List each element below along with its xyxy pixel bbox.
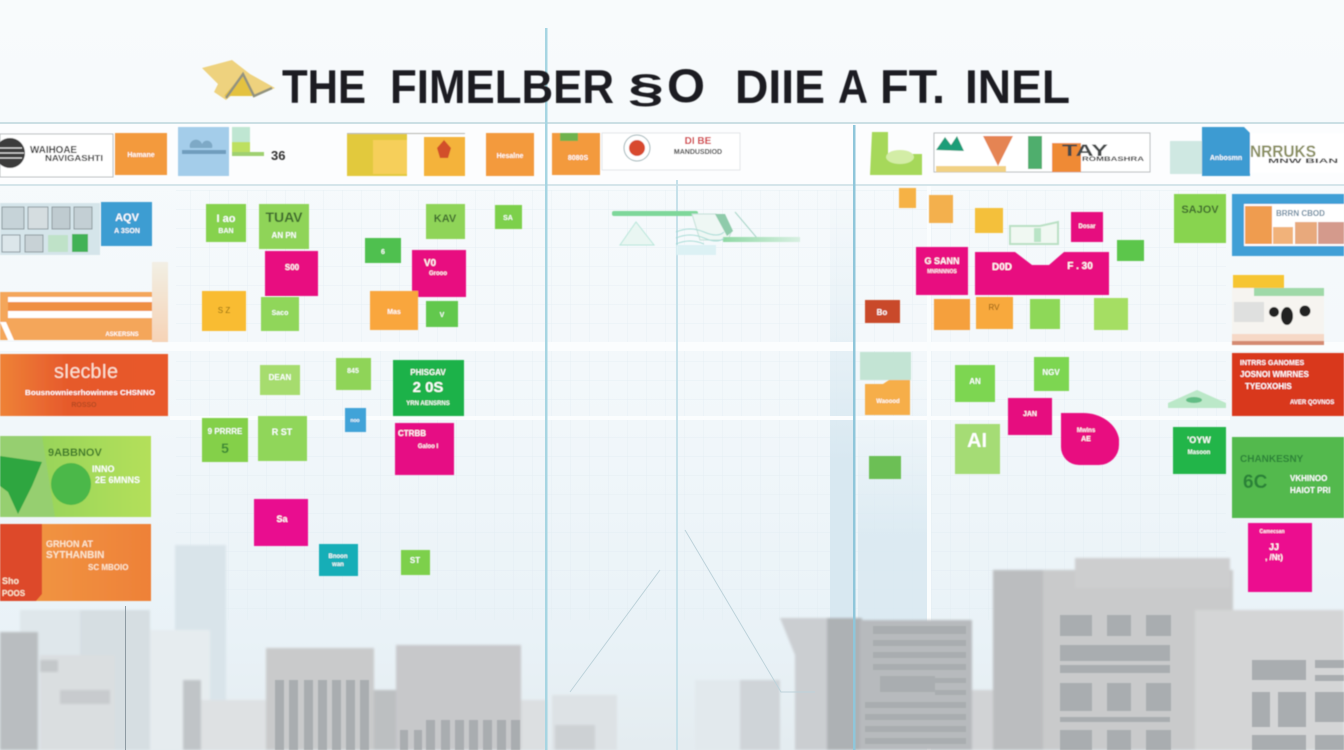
header tag: orange plain (486, 133, 534, 176)
panel: green leaf: 2E 6MNNS (95, 475, 140, 485)
sticky orange: RV (989, 303, 1000, 312)
sticky green (955, 365, 995, 402)
blue tag: A 3SON (114, 228, 140, 235)
sticky green: Masoon (1188, 450, 1211, 456)
sticky teal: wan (331, 562, 344, 568)
sticky magenta tall (1248, 523, 1312, 592)
header tag: green shape (870, 132, 922, 175)
header card: red emblem: DI BE (685, 136, 712, 147)
sticky magenta (395, 423, 454, 475)
panel: red orange: ROSSO (71, 402, 97, 409)
title text: A (838, 60, 868, 113)
panel: orange red: SC MBOIO (88, 563, 128, 572)
sticky yellow: S Z (218, 306, 230, 315)
sticky magenta: V0 (424, 258, 437, 269)
sticky green: AN (969, 377, 981, 386)
panel: orange red (0, 524, 151, 601)
title text: FT. (880, 60, 945, 113)
sticky red-orange (865, 300, 900, 323)
sticky green: V (440, 312, 445, 319)
sticky magenta: CTRBB (398, 429, 426, 438)
sticky blue: noo (350, 418, 360, 424)
sticky green: 'OYW (1187, 435, 1211, 445)
sticky green (1117, 240, 1144, 261)
sticky green large: AN PN (272, 231, 297, 240)
header row of timeline labels (0, 127, 1344, 177)
sticky green (258, 416, 307, 461)
rounded magenta note: Mwlns (1077, 428, 1096, 434)
header tag: blue with pale block: Anbosmn (1210, 155, 1242, 162)
panel: left column (0, 202, 168, 601)
sticky magenta: G SANN (924, 256, 960, 266)
icon grid (0, 203, 100, 255)
sticky magenta (916, 247, 968, 295)
panel: orange red: SYTHANBIN (46, 550, 104, 561)
sticky pale green (260, 365, 300, 395)
sticky orange: Mas (387, 309, 401, 316)
notched magenta banner (975, 252, 1109, 295)
sticky magenta tall: , /Nt) (1265, 553, 1283, 562)
title text: INEL (965, 60, 1070, 113)
sticky orange (929, 195, 953, 223)
sticky light green AI: AI (967, 430, 987, 452)
panel: red orange: sIecbIe (54, 361, 118, 383)
panel: green leaf: 9ABBNOV (48, 447, 102, 459)
header tag: orange folder: 8080S (568, 155, 588, 162)
panel: green: CHANKESNY (1240, 454, 1304, 465)
header card: logo label: WAIHOAE (30, 145, 77, 156)
sticky green: BAN (218, 228, 234, 235)
notched magenta banner: D0D (992, 262, 1012, 273)
panel: red: JOSNOI WMRNES (1240, 370, 1310, 379)
sticky pale green: DEAN (269, 373, 292, 382)
sticky green (426, 204, 465, 239)
panel: orange red: POOS (2, 589, 26, 598)
sticky red-orange: Bo (877, 308, 887, 317)
panel: blue with table: BRRN CBOD (1276, 209, 1325, 218)
blue tag (101, 202, 152, 246)
sticky yellow (202, 291, 246, 331)
panel: yellow and dots (1232, 275, 1324, 345)
sticky magenta (1008, 398, 1052, 435)
header card: right label (1250, 133, 1344, 173)
panel: green (1232, 437, 1344, 518)
panel: green: VKHINOO (1290, 474, 1327, 483)
title text (282, 59, 1070, 113)
header tag: yellow folder (347, 133, 465, 176)
sticky green (1174, 194, 1226, 243)
building windows (275, 615, 1344, 750)
panel: red: TYEOXOHIS (1245, 382, 1292, 391)
title text: DIIE (735, 60, 825, 113)
panel: orange stripes: ASKERSNS (105, 332, 139, 338)
header tag: orange: Hamane (127, 152, 155, 159)
sticky green: Saco (272, 310, 288, 317)
sticky green: I ao (217, 213, 236, 225)
sticky green: 845 (347, 368, 359, 375)
header card: right label: MNW BIAN (1268, 159, 1338, 165)
sticky green large (259, 204, 309, 249)
header tag: orange folder (552, 133, 600, 175)
title with logo (202, 59, 1070, 113)
sticky notes: right timeline (860, 188, 1226, 479)
sticky notes: left timeline (202, 204, 522, 576)
sticky green: 5 (221, 440, 229, 456)
sticky magenta tall: Camecsan (1259, 529, 1285, 535)
vertical timeline rules (125, 28, 856, 750)
sticky light green AI (955, 424, 1000, 474)
sticky yellow (975, 208, 1003, 233)
sticky green (1034, 357, 1069, 391)
title text: § (628, 67, 664, 111)
header card: mountains chart (934, 133, 1150, 172)
icon: title logo (202, 60, 275, 100)
sticky small green: SA (503, 215, 513, 222)
sticky magenta (254, 499, 308, 546)
panel: right column (1174, 194, 1344, 592)
panel: blue with table (1232, 194, 1344, 256)
header card: mountains chart: TAY (1062, 141, 1109, 160)
sticky green (426, 301, 458, 327)
panel: green: HAIOT PRI (1290, 486, 1330, 495)
sticky orange folder (865, 380, 910, 415)
sticky green: ST (410, 556, 420, 565)
title text: THE (282, 60, 366, 113)
sticky teal (319, 544, 358, 576)
sticky green (336, 358, 371, 390)
cityscape silhouette (0, 545, 1344, 750)
panel: red orange: Bousnowniesrhowinnes CHSNNO (25, 390, 156, 397)
sticky magenta (1071, 212, 1103, 242)
panel: orange red: Sho (2, 576, 20, 586)
pale chart outline (1010, 222, 1058, 244)
panel: orange red: GRHON AT (46, 539, 93, 549)
sticky green (1030, 299, 1060, 329)
header tag: orange (115, 133, 167, 175)
sticky green (206, 204, 246, 242)
sticky orange small (899, 188, 916, 208)
title text: O (667, 59, 705, 112)
sticky green large: TUAV (265, 209, 303, 225)
blue tag: AQV (115, 212, 140, 224)
panel: orange stripes (0, 262, 168, 342)
sticky green: 9 PRRRE (208, 427, 243, 436)
header card: logo label: NAVIGASHTI (45, 154, 103, 163)
sticky magenta: JAN (1023, 411, 1037, 418)
sticky green: NGV (1042, 368, 1060, 377)
header card: red emblem (602, 133, 740, 170)
header card: right label: NRRUKS (1250, 142, 1316, 161)
panel: red: AVER QOVNOS (1290, 400, 1334, 406)
header tag: green bar and number: 36 (271, 148, 285, 163)
sticky green: KAV (434, 213, 457, 225)
sticky green: SAJOV (1181, 204, 1219, 216)
sticky blue (345, 408, 366, 432)
pale green sticky (860, 352, 911, 380)
sticky dark green stat: 2 0S (413, 379, 443, 396)
sticky magenta: S00 (285, 263, 300, 272)
panel: green: 6C (1243, 472, 1268, 493)
sticky small green (495, 205, 522, 229)
sticky magenta: Grooo (429, 271, 447, 277)
sticky magenta (412, 250, 466, 297)
pale green house (1168, 390, 1226, 408)
sticky green (401, 550, 430, 575)
sticky magenta: Dosar (1078, 224, 1096, 230)
sticky teal: Bnoon (328, 554, 348, 560)
header card: mountains chart: ROMBASHRA (1082, 157, 1145, 163)
header card: red emblem: MANDUSDIOD (674, 149, 722, 156)
chart: central sketch (612, 211, 800, 255)
sticky orange (370, 291, 418, 330)
sticky green (869, 456, 901, 479)
sticky magenta: MNRNNNOS (927, 269, 957, 275)
panel: green leaf (0, 436, 151, 517)
sticky magenta: Galoo I (418, 444, 438, 450)
header tag: blue with pale block (1170, 127, 1250, 176)
header tag: green bar and number (232, 127, 285, 163)
rounded magenta note (1061, 413, 1119, 465)
notched magenta banner: F . 30 (1067, 261, 1093, 272)
header tag: blue cloud (178, 127, 229, 176)
sticky green (1173, 427, 1226, 474)
sticky magenta: Sa (276, 514, 288, 524)
panel: green leaf: INNO (92, 464, 114, 474)
rounded magenta note: AE (1081, 436, 1091, 443)
sticky magenta (265, 251, 318, 296)
sticky magenta tall: JJ (1269, 542, 1279, 552)
sticky dark green (365, 238, 401, 263)
sticky dark green stat (393, 360, 464, 416)
sticky dark green stat: YRN AENSRNS (406, 401, 450, 407)
panel: red (1232, 353, 1344, 416)
sticky dark green stat: PHISGAV (410, 368, 446, 377)
title text: FIMELBER (390, 60, 614, 113)
sticky green (1094, 298, 1128, 330)
sticky green: R ST (272, 427, 293, 437)
sticky dark green: 6 (381, 249, 385, 256)
sticky orange folder: Waoood (876, 399, 900, 405)
header tag: orange plain: Hesalne (497, 153, 524, 160)
panel: red orange (0, 354, 168, 416)
header card: logo label (0, 134, 113, 177)
panel: red: INTRRS GANOMES (1240, 360, 1304, 367)
sticky green (261, 297, 299, 331)
sticky orange (934, 299, 970, 330)
sticky orange (976, 297, 1013, 329)
sticky green (202, 418, 248, 462)
